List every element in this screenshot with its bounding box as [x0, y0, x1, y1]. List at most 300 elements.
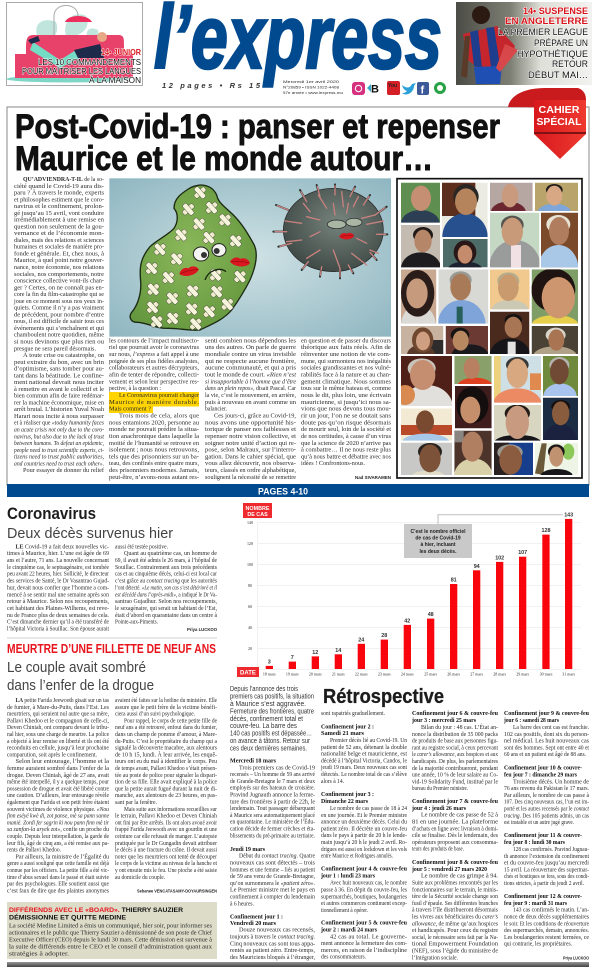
- column 1: leur fils, âgé de cinq ans, a été remise aux pa-: [7, 840, 109, 847]
- column 1: mencé à se sentir mal une semaine après son: [7, 591, 109, 598]
- timeline column 1: de 59 ans venu de Grande-Bretagne,: [230, 873, 315, 880]
- timeline column 4: Confinement jour 10 & couvre-: [504, 764, 582, 771]
- portrait 14: [401, 326, 444, 354]
- text column: intro 2 with highlighted question: afin de tenter de répondre, collecti-: [109, 372, 199, 378]
- timeline column 3: Le nombre de cas passe de 52 à: [421, 812, 498, 819]
- timeline column 4: nel médical. Les huit nouveaux cas: [504, 738, 590, 745]
- column 1: comparution, soit après le confinement.: [7, 751, 97, 758]
- column 1: également que Farida et son petit frère étaient: [7, 799, 109, 806]
- bar chart: cases per day: [237, 503, 581, 677]
- column 1: peu avant 22 heures, hier. Sollicité, le directeur: [7, 571, 109, 578]
- portrait 11: [490, 269, 530, 310]
- timeline column 2: drigues est aussi en lockdown et les vols: [321, 846, 408, 853]
- text column: intro 2 with highlighted question: pective, à la question :: [109, 385, 161, 392]
- column 1: des services de Santé, le Dr Vasantrao Gujad-: [7, 578, 109, 585]
- column 2: y ont ensuite mis le feu. Une pioche a été saisie: [115, 867, 217, 874]
- timeline column 1: de Grande-Bretagne le 7 mars et deux: [230, 778, 316, 785]
- text column: intro 2 with highlighted question: des prisonniers modernes. Jamais,: [109, 467, 199, 474]
- text column: intro 1: tant dans la béatitude. Le confine-: [14, 372, 104, 379]
- text column: intro 3: nous avons une opportunité his-: [205, 419, 296, 426]
- ad text: [498, 6, 588, 81]
- column 1: reconduits en cellule, jusqu’à leur prochaine: [7, 745, 109, 752]
- timeline column 2: [320, 710, 408, 961]
- date labels: 22 mars: [355, 672, 368, 676]
- text column: intro 1: chamboulent notre quotidien, même: [14, 332, 104, 339]
- text column: intro 1: peut extraire du bon, avec un brin: [14, 359, 105, 366]
- text column: intro 1: quiets. Comme il n’y a pas vraiment: [14, 305, 104, 312]
- timeline column 4: Par ailleurs, le nombre de cas passe à: [504, 792, 589, 799]
- text column: intro 1: between humans. To defeat an epidemic,: [14, 440, 104, 447]
- y axis title: [243, 503, 272, 518]
- timeline column 4: est instable et un autre jugé grave.: [504, 819, 574, 826]
- column 1: manié. Zordi fer sagrin ki nou pann finn mè tir: [7, 819, 110, 826]
- column 2: que la petite aurait fugué durant la nuit de di-: [115, 785, 217, 792]
- timeline column 3: fonctionnaires sur le terrain, le minis-: [412, 886, 498, 893]
- column 2: pratiquée par le Dr Gungadin devait attribuer: [115, 840, 217, 847]
- callout: de cas de Covid-19: [415, 536, 461, 542]
- column 1: même été interpellé, il y a quelque temps, pour: [7, 779, 109, 786]
- column 1: C’est dimanche dernier qu’il a été transféré de: [7, 619, 109, 626]
- timeline column 1: blissements du pré-primaire au tertiaire.: [230, 832, 315, 839]
- text column: intro 4: nous le dit, plus loin, une écrivain: [301, 392, 392, 399]
- portrait 20: [543, 356, 578, 396]
- column 1: drogue. Deven Chiniah, âgé de 27 ans, avait: [7, 772, 109, 779]
- column 2: 69, il avait été admis le 26 mars, à l’hôpital de: [115, 557, 217, 564]
- text column: intro 2 with highlighted question: vement et selon leur perspective res-: [109, 378, 199, 385]
- column 2: Sebanee VENCATASAMY-DOYAURSINGEN: [137, 888, 218, 894]
- text column: intro 1: à remettre en avant le collectif et le: [14, 386, 104, 393]
- column 1: connue par les officiers. La petite fille a été vic-: [7, 867, 109, 874]
- column 1: times à Maurice, hier. L’une est âgée de 69: [7, 550, 109, 557]
- text column: intro 3: balancier.: [205, 406, 227, 413]
- ribbon: cahier special: SPÉCIAL: [536, 115, 582, 128]
- text column: intro 2 with highlighted question: teau, des confinés entre quatre murs,: [109, 460, 199, 467]
- timeline column 4: 60 ans et un patient est âgé de 88 ans.: [504, 751, 586, 758]
- timeline column 3: tional Empowerment Foundation: [412, 941, 498, 948]
- text column: intro 3: [205, 337, 297, 481]
- portrait 28: [535, 442, 578, 475]
- bar values: 81: [451, 578, 457, 584]
- text column: intro 3: soigner notre unité d’action qui re-: [205, 440, 296, 447]
- portrait 15: [446, 326, 488, 354]
- portrait 27: [494, 442, 533, 475]
- panel: brief on Thierry Sauzier: stratégies à adopter.: [9, 951, 70, 958]
- timeline column 1: cation décide de fermer crèches et éta-: [230, 826, 315, 832]
- text column: intro 1: nous, il est difficile de saisir tous ces: [14, 318, 104, 325]
- text column: intro 1: an acute crisis not only due to the coro-: [14, 426, 104, 434]
- issue info: N°20859 • ISSN 1022-4408: [283, 86, 339, 90]
- timeline column 1: Pravind Jugnauth annonce la ferme-: [230, 792, 315, 798]
- bar values: 7: [291, 655, 294, 661]
- column 2: teurs ont eu du mal à identifier le corps. Peu: [115, 758, 217, 765]
- column 2: neuf ans a été retrouvé, enfoui dans du fumier,: [115, 724, 217, 731]
- timeline column 4: 15 avril. La réouverture des supermar-: [504, 866, 589, 873]
- column 2: l’ont détecté. «Le matin, son cas s’est détérioré et il: [115, 584, 217, 591]
- timeline column 3: cile se finalise. Dès le lendemain, des: [412, 832, 499, 839]
- timeline column 1: Le Premier ministre met le pays en: [230, 887, 315, 894]
- bar values: 28: [381, 633, 387, 639]
- issue info: 12 pages • Rs 15: [162, 81, 261, 90]
- timeline column 2: Dimanche 22 mars: [321, 798, 368, 805]
- timeline column 3: tère de la Sécurité sociale change son: [412, 893, 498, 900]
- retrospective intro: Fermeture des frontières, quatre: [230, 708, 314, 715]
- portrait 19: [494, 356, 541, 403]
- timeline column 2: merces, en raison de l’indiscipline: [321, 947, 407, 954]
- column 2: ceinture car elle refusait de manger. L’autopsie: [115, 833, 217, 840]
- timeline column 1: à 6 heures.: [230, 900, 254, 907]
- ribbon: cahier special: CAHIER: [538, 105, 580, 116]
- text column: intro 3: tout le monde de court. «Rien n’est: [205, 372, 296, 378]
- ad text: 14• SUSPENSE: [523, 6, 588, 16]
- advertisement: premier league: [456, 2, 592, 85]
- text column: intro 1: d’optimisme, sans tomber pour au-: [14, 366, 104, 373]
- retrospective intro: couvre-feu. La barre des: [230, 723, 297, 730]
- timeline column 3: Confinement jour 7 & couvre-feu: [412, 798, 498, 805]
- text column: intro 1: and countries need to trust each other».: [14, 460, 104, 467]
- text column: intro 1: gé jusqu’au 15 avril, vont conduire: [14, 210, 104, 217]
- column 1: LE Covid-19 a fait deux nouvelles vic-: [16, 543, 109, 550]
- timeline column 1: recensés – Un homme de 59 ans arrivé: [230, 771, 315, 778]
- timeline column 2: Confinement jour 3 :: [321, 791, 374, 798]
- timeline column 1: Trois premiers cas de Covid-19: [239, 764, 315, 771]
- column 1: time d’abus sexuel dans le passé et était suivie: [7, 874, 109, 881]
- heading: Le couple avait sombré: [7, 659, 146, 676]
- date labels: 27 mars: [470, 672, 484, 676]
- text column: intro 1: question non seulement de la gou-: [14, 223, 104, 230]
- text column: intro 3: si insupportable à l’homme que d’être: [205, 378, 296, 385]
- column 2: avaient été faites sur la hotline du ministère. Elle: [115, 697, 217, 704]
- column 1: de fumier, à Mare-du-Puits, dans l’Est. Les: [7, 704, 110, 711]
- column 2: dans un champ de pomme d’amour, à Mare-: [115, 731, 217, 738]
- highlighted question: Le Coronavirus pourrait changer: [119, 392, 200, 399]
- bar values: 128: [542, 528, 550, 534]
- timeline column 3: Confinement jour 6 & couvre-feu: [412, 710, 498, 717]
- timeline column 1: Mercredi 18 mars: [230, 758, 276, 765]
- portrait 8: [541, 212, 578, 268]
- timeline column 3: l’Intégration sociale.: [412, 954, 458, 961]
- banner: pages 4-10: PAGES 4-10: [258, 486, 308, 496]
- column 1: hur, devait nous confier que l’homme a com-: [7, 584, 109, 591]
- timeline column 4: 128 cas confirmés. Pravind Jugnau-: [513, 846, 589, 853]
- column 2: [115, 543, 218, 632]
- column 1: sa zanfan-la aryek zot», confie un proche du: [7, 826, 109, 833]
- callout: C’est le nombre officiel: [410, 529, 466, 535]
- retrospective intro: premiers cas positifs, la situation: [230, 693, 314, 700]
- y axis labels: 60: [248, 604, 252, 609]
- timeline column 3: Bilan du jour : 48 cas. L’État an-: [421, 723, 498, 731]
- text column: intro 1: nance, notre économie, nos relations: [14, 264, 104, 271]
- timeline column 3: vid-19 Solidarity Fund, institué par le: [412, 778, 498, 785]
- date labels: 19 mars: [286, 672, 299, 676]
- text column: intro 1: vernance et de l’économie mon-: [14, 230, 104, 237]
- column 2: est décédé dans l’après-midi», a indiqué le Dr Va-: [115, 591, 217, 598]
- portrait 18: [454, 356, 492, 384]
- timeline column 2: décédé à l’hôpital Victoria, Candos, le: [321, 757, 407, 764]
- retrospective intro: ces deux dernières semaines.: [230, 746, 307, 753]
- column 1: ans et l’autre, 71 ans. La nouvelle concernant: [7, 557, 109, 564]
- social icons: [352, 81, 446, 96]
- text column: intro 1: Pour essayer de donner du relief: [23, 467, 105, 474]
- text column: intro 1: conscience collective vont-ils chan-: [14, 278, 104, 285]
- text column: intro 3: teurs, classés en ordre alphabétique,: [205, 467, 296, 474]
- y axis labels: 20: [248, 646, 252, 651]
- text column: intro 2 with highlighted question: Trois mois de cela, alors que: [119, 412, 199, 419]
- portrait 22: [494, 405, 541, 441]
- ad text: 14• JUNIOR: [101, 48, 141, 57]
- text column: intro 1: ger ? Certes, on ne connaît pas en-: [14, 284, 104, 291]
- text column: intro 1: QU’ADVIENDRA-T-IL de la so-: [23, 176, 104, 183]
- panel: brief on Thierry Sauzier: actionnaires et le public que Thierry Sauzier a démissionné de son poste de Chief: [9, 929, 213, 936]
- timeline column 2: dans le pays à partir de 20 h le lende-: [321, 832, 407, 839]
- portrait 2: [442, 182, 488, 237]
- bar values: 24: [358, 638, 364, 644]
- text column: intro 1: arrêt brutal. L’historien Yuval Noah: [14, 406, 105, 413]
- timeline column 3: allowance, de même qu’aux hospices: [412, 920, 499, 927]
- timeline column 3: et handicapés. Pour ceux du registre: [412, 927, 498, 934]
- bars: [266, 519, 572, 669]
- column 1: femme auraient sombré dans l’enfer de la: [7, 765, 109, 772]
- portrait 6: [443, 239, 488, 268]
- column 2: santrao Gujadhur. Selon nos recoupements,: [115, 598, 217, 605]
- text column: intro 4: vions que nous devons tous mou-: [301, 406, 391, 413]
- text column: intro 1: sociales, nos comportements, notre: [14, 271, 104, 278]
- text column: intro 4: que la science de 2020 n’arrive pas: [301, 440, 391, 447]
- timeline column 2: ment annonce la fermeture des com-: [321, 940, 407, 947]
- column 1: finn eséyé kwè di, zot panse, mè sa pann sanne: [7, 813, 109, 820]
- text column: intro 1: navirus, but also due to the lack of trust: [14, 433, 104, 440]
- timeline column 2: Confinement jour 5 & couvre-feu: [321, 920, 407, 927]
- column 1: souvent victimes de violence physique. «Nou: [7, 806, 109, 813]
- text column: intro 4: rir un jour, l’on ne se doutait sans: [301, 412, 391, 419]
- timeline column 1: Douze nouveaux cas recensés,: [239, 927, 315, 934]
- timeline column 2: des consommateurs.: [321, 954, 366, 961]
- timeline column 3: opérateurs proposent aux consomma-: [412, 839, 498, 846]
- x axis title: [237, 667, 259, 677]
- timeline column 2: patient zéro. Il décrète un couvre-feu: [321, 825, 407, 832]
- column 2: de 10 h 15, lundi. À leur arrivée, les enquê-: [115, 750, 217, 758]
- timeline column 4: [503, 710, 590, 960]
- social icons: B: [371, 84, 379, 96]
- text column: intro 1: joue en ce moment sous nos yeux in-: [13, 298, 104, 305]
- portrait 17: [401, 356, 452, 406]
- y axis labels: 40: [248, 625, 252, 630]
- retrospective intro: décès, confinement total et: [230, 716, 303, 723]
- column 1: [7, 697, 110, 894]
- timeline column 4: Troisième décès. Un homme de: [513, 778, 589, 785]
- text column: intro 1: si nous devinons que plus rien ou: [14, 338, 105, 346]
- title: Post-Covid-19 : panser et repenser: [15, 108, 500, 146]
- x axis title: DATE: [240, 670, 256, 676]
- text column: intro 1: rer la machine économique, mise en: [14, 399, 105, 406]
- highlighted question: Maurice de manière durable.: [109, 399, 199, 406]
- timeline column 4: Confinement jour 9 & couvre-feu: [504, 710, 589, 717]
- text column: intro 3: gation. Dans le cahier spécial, que: [205, 453, 296, 460]
- timeline column 1: en quarantaine. Le ministère de l’Édu-: [230, 818, 315, 826]
- portrait 5: [401, 225, 440, 268]
- timeline column 1: hommes et une femme – liés au patient: [230, 866, 315, 873]
- portrait 24: [401, 408, 452, 441]
- text column: intro 3: repenser notre vision collective, et: [205, 433, 296, 440]
- column 2: [115, 697, 218, 894]
- timeline column 1: rentés au patient zéro. Entre-temps,: [230, 947, 315, 954]
- timeline column 2: 42 cas au total. Le gouverne-: [330, 933, 407, 940]
- text column: intro 1: et à réaliser que «today humanity faces: [14, 420, 104, 427]
- timeline column 1: Confinement jour 1 :: [230, 913, 283, 920]
- timeline column 1: qu’on surnommera le «patient zéro».: [230, 880, 315, 887]
- timeline column 4: Les boulangeries restent fermées, ce: [504, 934, 589, 941]
- timeline column 3: teurs des produits de base.: [412, 846, 464, 853]
- portrait grid: [395, 179, 582, 495]
- column 2: était d’abord en quarantaine dans un centre à: [115, 612, 217, 619]
- timeline column 4: 102 cas positifs, dont six du person-: [504, 731, 589, 738]
- column 2: ont fini par être arrêtés. Ils ont alors avoué avoir: [115, 819, 217, 826]
- y axis title: DE CAS: [247, 512, 268, 518]
- text column: intro 1: de précédent, pour nombre d’entre: [14, 311, 104, 318]
- text column: intro 1: événements qui s’enchaînent et qui: [14, 325, 104, 332]
- column 2: le terrain, Pallavi Khedoo et Deven Chiniah: [115, 813, 218, 820]
- timeline column 3: d’achats en ligne avec livraison à domi-: [412, 825, 498, 832]
- timeline column 2: détectés. Le nombre total de cas s’élève: [321, 771, 407, 778]
- text column: intro 4: de mourir seul, loin de la société et: [301, 426, 391, 433]
- panel: brief on Thierry Sauzier: Executive Officer (CEO) depuis le lundi 30 mars. Cette démission est survenue à: [9, 936, 212, 944]
- column 1: l’hôpital Victoria à Souillac. Son épouse aurait: [7, 626, 109, 632]
- bar values: 102: [495, 556, 504, 562]
- timeline column 3: jour 5 : vendredi 27 mars 2020: [411, 866, 487, 873]
- timeline column 3: à travers l’île distribueront désormais: [412, 907, 499, 914]
- timeline column 1: confinement à compter du lendemain: [230, 894, 315, 900]
- text column: intro 2 with highlighted question: [109, 337, 200, 481]
- text column: intro 1: Maurice, à quel point notre gouver-: [14, 257, 104, 264]
- ad text: LA PREMIER LEAGUE: [498, 27, 588, 38]
- timeline column 2: alors à 14.: [321, 778, 344, 785]
- timeline column 4: porté et les autres recensés par le contact: [504, 806, 589, 812]
- column 2: sant par la fenêtre.: [115, 799, 157, 806]
- ad text: DÉBUT MAI…: [528, 70, 588, 81]
- timeline column 4: Priya LUCKOO: [563, 956, 589, 960]
- text column: intro 2 with highlighted question: monde ne pouvait prédire la situa-: [109, 426, 199, 433]
- text column: intro 1: navirus et le confinement, prolon-: [14, 203, 104, 210]
- portrait 7: [490, 212, 540, 268]
- column 2: le sexagénaire, qui serait un habitant de l’Est,: [115, 605, 217, 612]
- ad text: [22, 48, 141, 85]
- ad text: À LA MAISON: [89, 76, 141, 85]
- timeline column 3: jour 3 : mercredi 25 mars: [411, 717, 476, 724]
- ad text: LES 10 COMMANDEMENTS: [38, 58, 141, 67]
- date labels: 30 mars: [540, 672, 553, 676]
- text column: intro 3: soulignent la nécessité de se remettre: [205, 474, 296, 481]
- y axis title: NOMBRE: [246, 506, 270, 512]
- portrait 9: [401, 269, 436, 324]
- column 1: une caution. D’ailleurs, leur entourage révèle: [7, 792, 109, 799]
- text column: intro 4: idées ! Confrontons-nous.: [301, 460, 365, 467]
- callout: à hier, incluant: [420, 542, 456, 548]
- bar values: 143: [564, 512, 573, 518]
- text column: intro 4: en question et de passer du discours: [301, 337, 391, 344]
- retrospective intro: on avance à tâtons. Retour sur: [230, 738, 311, 745]
- portrait 4: [535, 182, 578, 211]
- date labels: 24 mars: [401, 672, 414, 676]
- text column: intro 1: ciété quand le Covid-19 aura dis-: [14, 183, 104, 190]
- timeline column 3: de la majorité contribueront, pendant: [412, 765, 498, 772]
- column 2: Priya LUCKOO: [187, 627, 217, 632]
- article: meurtre: [7, 641, 218, 894]
- timeline column 4: des supermarchés, demain, annoncées.: [504, 927, 589, 934]
- timeline column 4: feu jour 9 : mardi 31 mars: [504, 900, 567, 907]
- timeline column 3: le carer’s allowance, aux hospices et aux: [412, 751, 499, 758]
- text column: intro 3: mondiale contre un virus invisible: [205, 351, 296, 358]
- ad text: HYPOTHÉTIQUE: [517, 49, 588, 60]
- timeline column 2: jour 2 : mardi 24 mars: [320, 927, 377, 934]
- timeline column 2: sont rapatriés graduellement.: [321, 710, 385, 717]
- timeline column 2: tionnellement à opérer.: [321, 907, 368, 914]
- text column: intro 1: irrémédiablement à une remise en: [14, 217, 105, 224]
- panel: brief on Thierry Sauzier: [7, 902, 217, 959]
- date labels: [263, 672, 576, 676]
- panel: brief on Thierry Sauzier: DÉMISSIONNE ET QUITTE MEDINE: [9, 912, 127, 922]
- text column: intro 2 with highlighted question: poignée de ses plus fidèles analystes,: [109, 358, 199, 365]
- column 1: le cinquième cas, le septuagénaire, est tombée: [7, 564, 109, 571]
- text column: intro 4: sociales grandissantes et nos vulné-: [301, 365, 391, 372]
- column 1: nu de France plus de deux semaines de cela.: [7, 612, 109, 619]
- portrait 13: [490, 312, 530, 354]
- text column: intro 3: la vie, c’est le mouvement, en arrière,: [205, 392, 296, 399]
- timeline column 4: nonce de deux décès supplémentaires: [504, 914, 590, 920]
- timeline column 4: La barre des cent cas est franchie.: [513, 724, 589, 731]
- column 1: possession de drogue et avait été libéré contre: [7, 785, 109, 792]
- heading: dans l’enfer de la drogue: [7, 677, 154, 694]
- y axis labels: [247, 520, 253, 651]
- text column: intro 2 with highlighted question: sur nous, l’express a fait appel à une: [109, 351, 199, 358]
- timeline column 1: Vendredi 20 mars: [230, 920, 276, 927]
- y axis labels: 100: [247, 562, 253, 567]
- timeline column 2: nationalité belge et mauricienne, est: [321, 751, 407, 758]
- social icons: You: [388, 83, 397, 89]
- timeline column 1: Cinq nouveaux cas sont tous appa-: [230, 940, 315, 947]
- timeline column 2: main jusqu’à 20 h le jeudi 2 avril. Ro-: [321, 839, 407, 846]
- highlighted question: [109, 392, 200, 413]
- retrospective intro: à Maurice s’est aggravée.: [230, 701, 306, 708]
- timeline column 1: Début du contact tracing. Quatre: [239, 853, 315, 860]
- column 2: de temps avant, Pallavi Khedoo s’était présen-: [115, 765, 217, 772]
- text column: intro 4: à combattre… Il ne nous reste plus: [301, 447, 391, 454]
- timeline column 1: toujours à travers le contact tracing.: [230, 934, 315, 940]
- retrospective intro: [230, 686, 314, 753]
- timeline column 4: le soir. Et les conditions de réouverture: [504, 920, 589, 927]
- text column: intro 4: qu’à nous battre et débattre avec nos: [301, 453, 391, 460]
- portrait 1: [401, 182, 440, 223]
- portrait 25: [401, 442, 452, 475]
- timeline column 2: supermarchés, boutiques, boulangeries: [321, 893, 408, 900]
- timeline column 4: th annonce l’extension du confinement: [504, 853, 589, 860]
- text column: intro 3: uns des autres. On parle de guerre: [205, 344, 296, 351]
- text column: intro 3: senti combien nous dépendons les: [205, 337, 296, 344]
- timeline column 4: feu jour 8 : lundi 30 mars: [504, 839, 565, 846]
- text column: intro 1: bien commun afin de faire redémar-: [14, 393, 104, 400]
- timeline column 2: passe à 36. En dépit du couvre-feu, les: [321, 886, 408, 894]
- text column: intro 3: Ces jours-ci, grâce au Covid-19,: [214, 412, 296, 419]
- date labels: 31 mars: [562, 672, 576, 676]
- column 1: c’est faux de dire que des plaintes anonymes: [7, 887, 110, 894]
- column 1: retour à Maurice. Selon nos recoupements,: [7, 598, 109, 605]
- timeline column 1: nouveaux cas sont détectés – trois: [230, 860, 316, 866]
- timeline column 1: lendemain. Tout passager débarquant: [230, 805, 315, 812]
- text column: intro 1: people need to trust scientific experts, ci-: [13, 447, 104, 454]
- timeline column 2: en une journée. Et le Premier ministre: [321, 812, 407, 819]
- timeline column 4: qui contrarie, les propriétaires.: [504, 941, 572, 948]
- text column: intro 1: fonde et générale. Et, chez nous, à: [14, 250, 104, 258]
- column 2: ciera aussi d’un suivi psychologique.: [115, 711, 195, 718]
- date labels: 20 mars: [309, 672, 322, 676]
